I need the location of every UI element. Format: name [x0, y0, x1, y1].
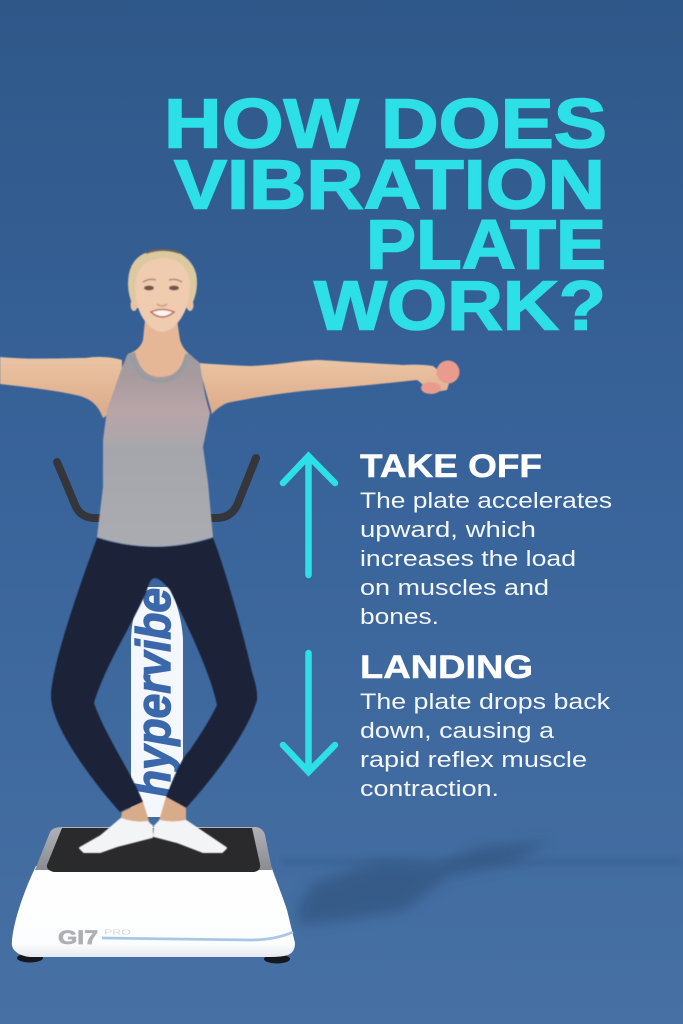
title: HOW DOES: [164, 84, 607, 162]
tank neckline: [131, 354, 187, 381]
text block: landing: down, causing a: [360, 718, 555, 743]
neck and chest: [128, 320, 192, 385]
woman figure: [0, 250, 460, 852]
title: PLATE: [366, 206, 606, 284]
arm: left: [0, 357, 122, 418]
title: [164, 84, 607, 344]
machine handles: [57, 458, 256, 518]
hair dark band: [146, 250, 180, 253]
nose: [157, 304, 167, 306]
black pad: [47, 828, 260, 872]
floor shadow: [280, 840, 683, 925]
text block: take off: bones.: [360, 604, 439, 629]
arrow: down: [283, 653, 335, 772]
smile: [151, 310, 174, 317]
arrow: up: [283, 456, 335, 575]
hypervibe column: [128, 587, 183, 817]
text block: landing: LANDING: [360, 649, 533, 685]
text block: take off: [360, 448, 612, 629]
leggings: [51, 538, 257, 812]
ankles: [120, 797, 186, 824]
hair: [128, 250, 197, 308]
text block: take off: on muscles and: [360, 575, 549, 600]
vibration plate machine: [12, 827, 295, 964]
brand text: hypervibe: hypervibe: [128, 588, 181, 797]
eyes: [144, 286, 154, 290]
grey rim: [35, 827, 272, 870]
dumbbell: [421, 360, 460, 394]
sock: right: [154, 821, 226, 852]
text block: landing: [360, 649, 611, 801]
arm: right: [198, 360, 450, 414]
text block: take off: upward, which: [360, 517, 536, 542]
text block: take off: TAKE OFF: [360, 448, 542, 484]
machine body: [12, 866, 295, 957]
text block: take off: increases the load: [360, 546, 576, 571]
text block: landing: rapid reflex muscle: [360, 747, 587, 772]
title: VIBRATION: [174, 146, 605, 224]
eyebrows: [143, 279, 182, 282]
feet: [17, 954, 43, 962]
title: WORK?: [314, 266, 606, 344]
sock: left: [80, 819, 152, 852]
text block: landing: contraction.: [360, 776, 499, 801]
tank top: [97, 352, 213, 546]
text block: take off: The plate accelerates: [360, 488, 612, 513]
text block: landing: The plate drops back: [360, 689, 611, 714]
face: [135, 258, 190, 332]
ears: [130, 299, 138, 311]
model label: GI7: [58, 928, 98, 949]
accent stripe: [102, 932, 293, 940]
vibration plate machine: PRO: [104, 928, 131, 936]
